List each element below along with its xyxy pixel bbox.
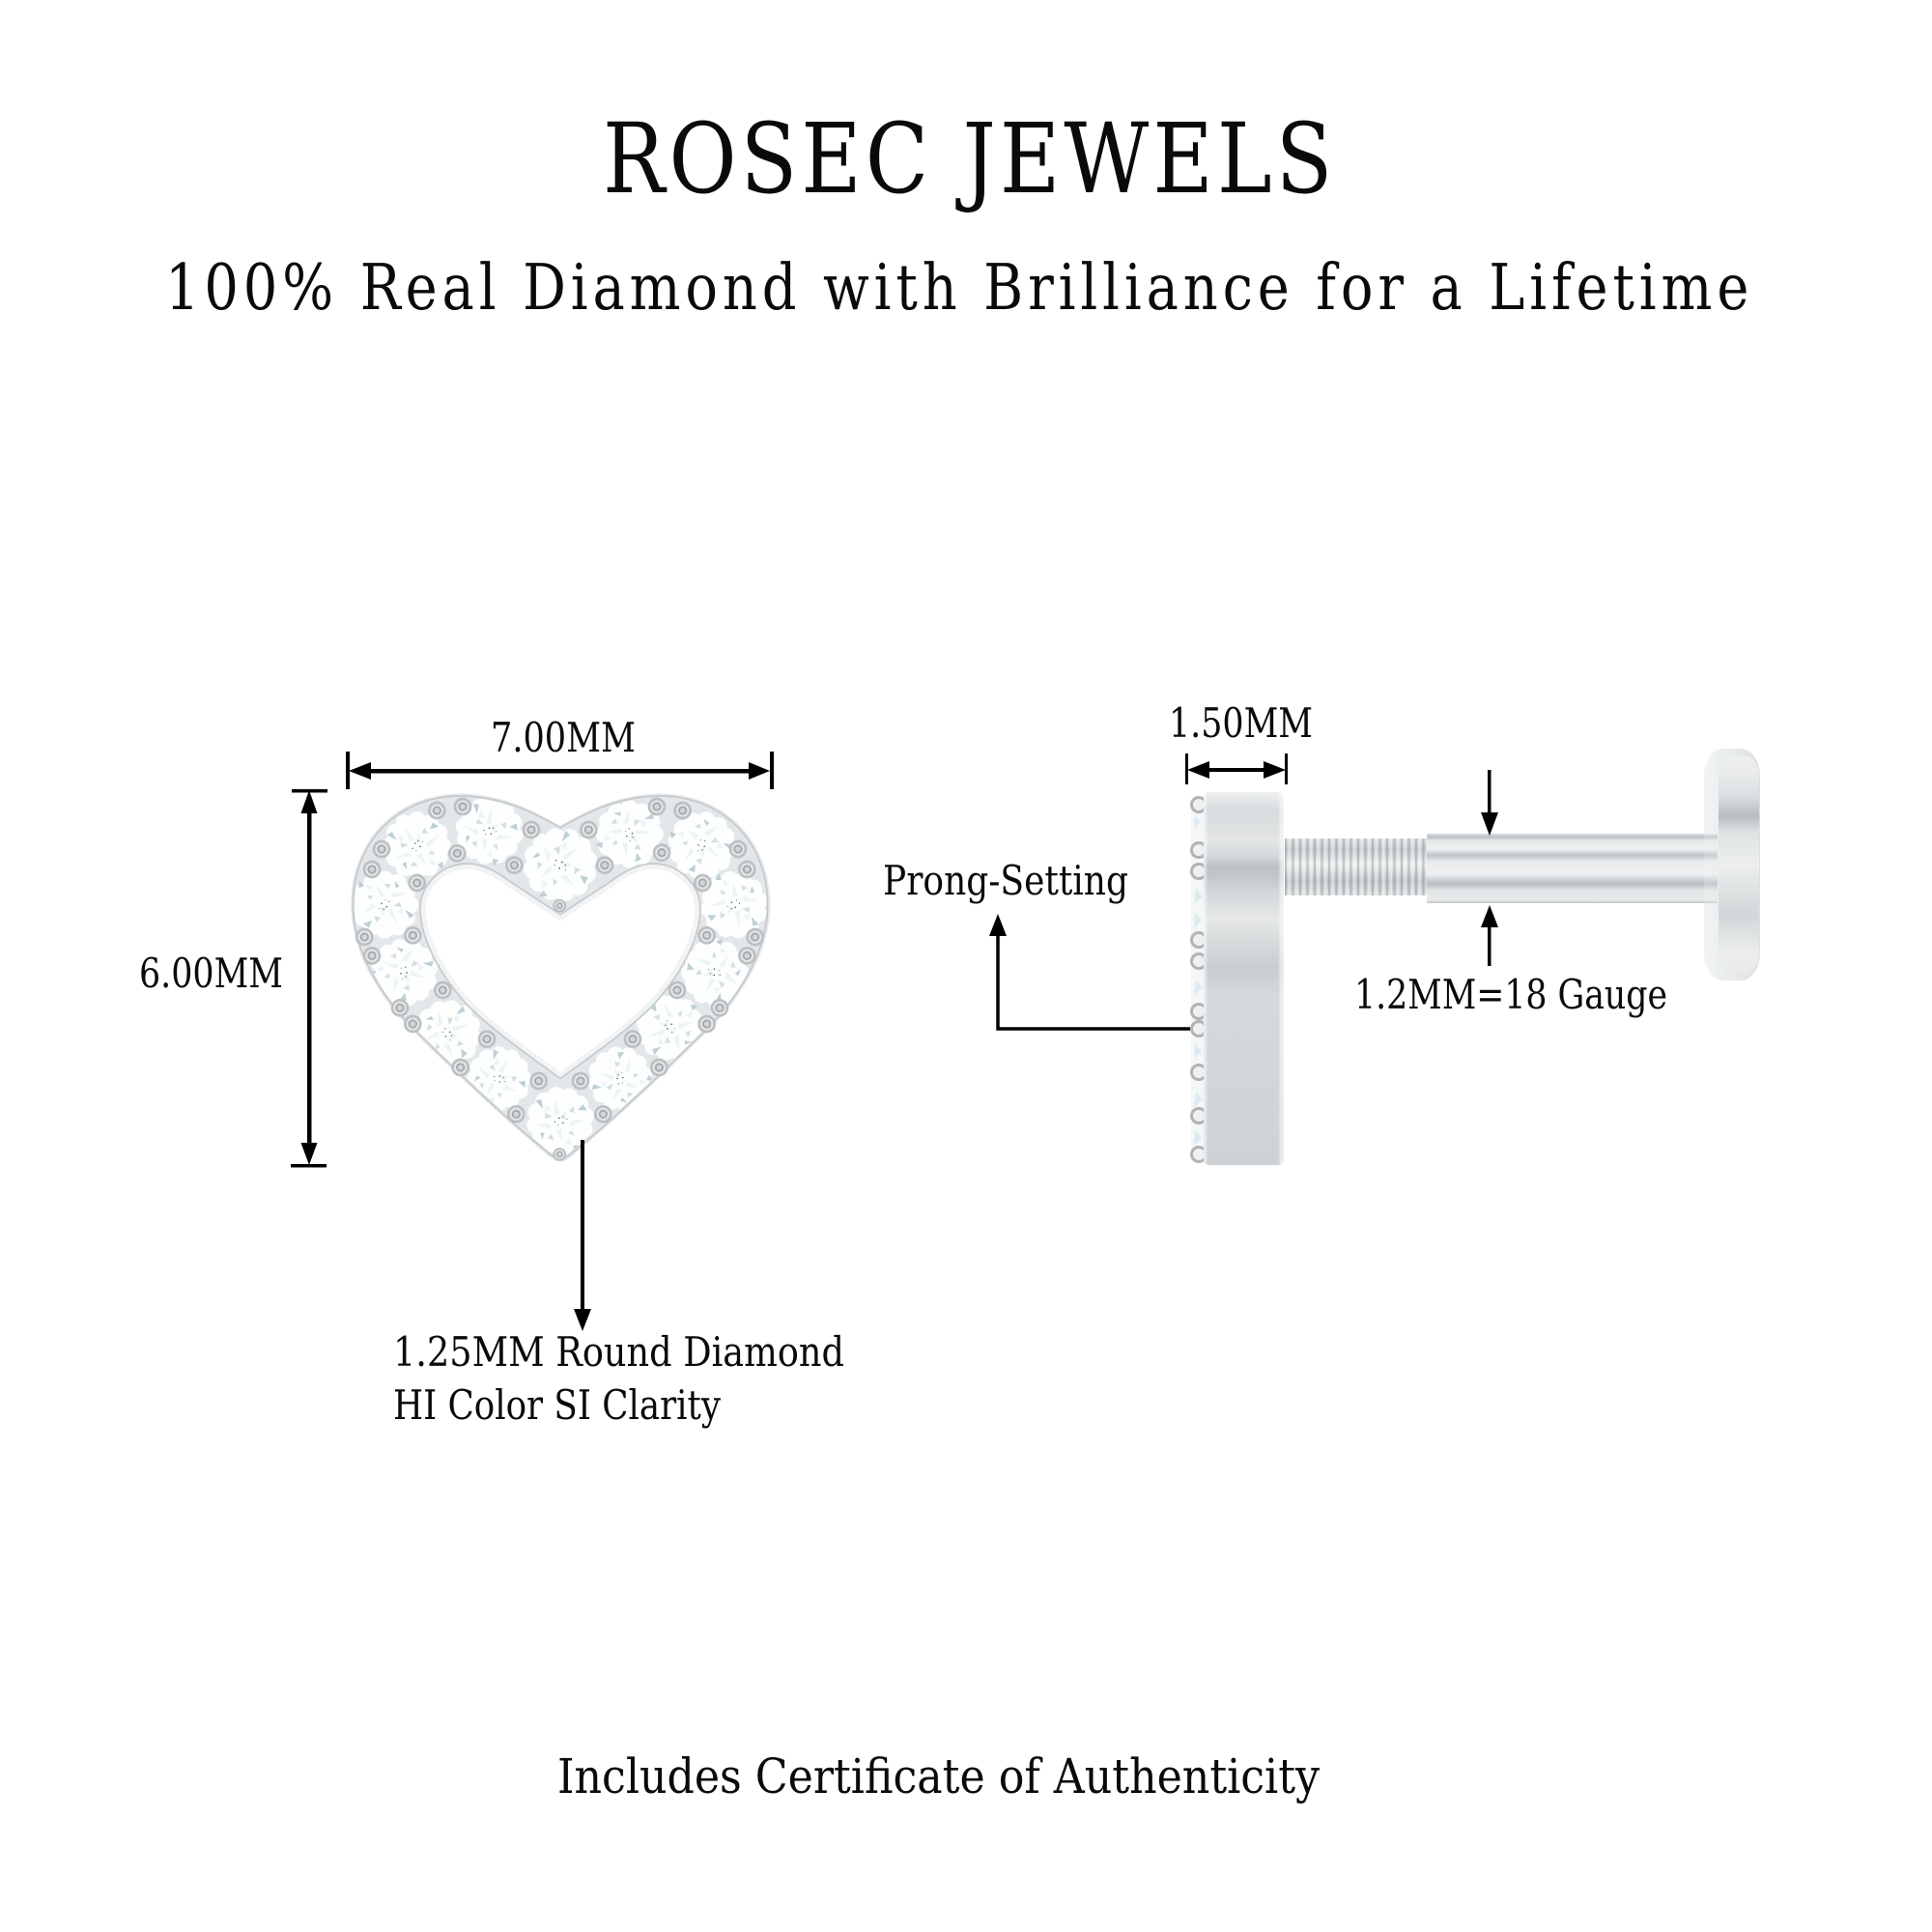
- heart body side: [1204, 792, 1284, 1165]
- diamonds: [351, 783, 778, 1164]
- width dimension arrow 7.00MM: [346, 752, 774, 789]
- height label: 6.00MM: [139, 950, 283, 997]
- diamond spec text: HI Color SI Clarity: [393, 1381, 722, 1429]
- heart earring front view: [351, 783, 778, 1164]
- prong edge: [1191, 798, 1208, 1161]
- prong-setting callout arrow: [989, 914, 1190, 1029]
- title: ROSEC JEWELS: [603, 103, 1332, 216]
- thickness dimension arrow 1.50MM: [1185, 753, 1288, 784]
- thickness label: 1.50MM: [1169, 699, 1313, 747]
- certificate footer: Includes Certificate of Authenticity: [557, 1748, 1321, 1804]
- gauge label: 1.2MM=18 Gauge: [1354, 971, 1667, 1018]
- back disc: [1704, 749, 1760, 980]
- height dimension arrow 6.00MM: [291, 789, 327, 1167]
- heart rim: [351, 794, 770, 1161]
- subtitle: 100% Real Diamond with Brilliance for a Lifetime: [165, 251, 1748, 325]
- side view of earring: [1191, 749, 1760, 1165]
- diamond spec text: 1.25MM Round Diamond: [393, 1328, 844, 1376]
- prong-setting label: Prong-Setting: [883, 857, 1128, 904]
- heart metal frame: [351, 794, 770, 1161]
- smooth post: [1427, 834, 1718, 903]
- diamond callout arrow: [574, 1140, 591, 1331]
- prongs: [355, 798, 764, 1161]
- threaded post: [1285, 838, 1427, 895]
- diamond spec text: [393, 1328, 844, 1429]
- gauge arrows: [1481, 770, 1498, 966]
- width label: 7.00MM: [491, 714, 636, 761]
